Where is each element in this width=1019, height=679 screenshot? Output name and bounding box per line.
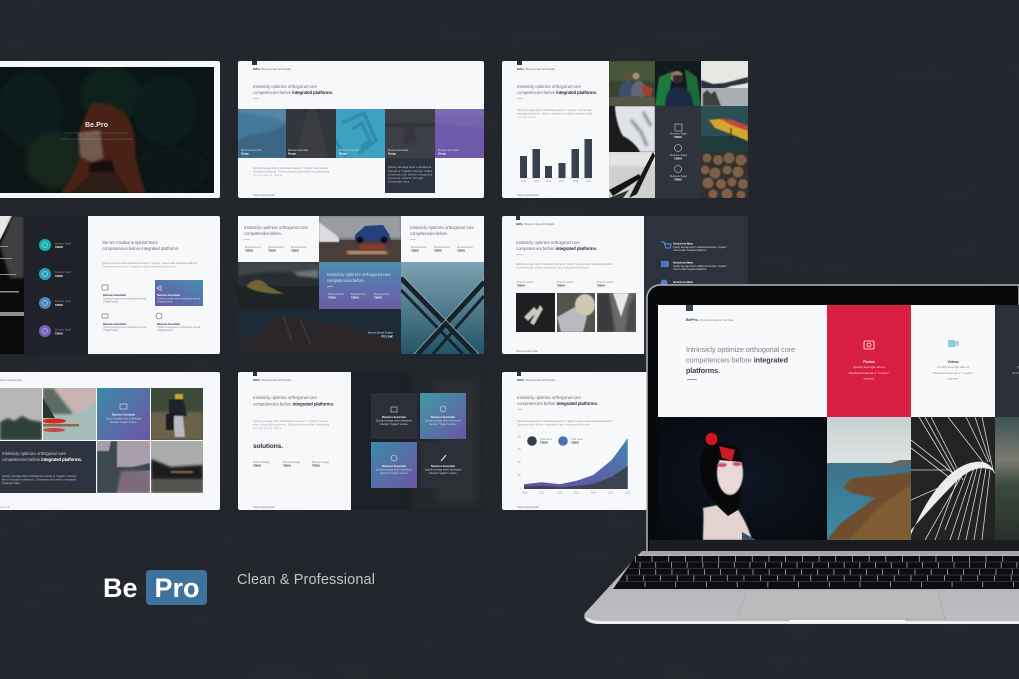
panel: white text left: competencies before. xyxy=(244,231,282,236)
panel: gradient feature: Quickly leverage other's distributed xyxy=(106,418,142,420)
legend: Total Sales xyxy=(540,438,553,441)
bar chart: 2012 xyxy=(534,181,540,183)
dark text box: business models through xyxy=(388,177,424,180)
cover subtitle xyxy=(60,132,134,141)
icon: cyan badge: 739091 xyxy=(55,275,64,278)
area chart: 2013 xyxy=(574,492,580,494)
bar chart: 2016 xyxy=(586,181,592,183)
stat labels: 739091 xyxy=(283,464,292,468)
icon: globe xyxy=(674,166,682,172)
feature: gradient card xyxy=(155,280,203,306)
feature: business essentials 3 xyxy=(156,313,200,332)
panel: gradient text centre: 739091 xyxy=(351,296,360,300)
stat labels: 739091 xyxy=(597,284,606,288)
image: blue mountain: Design xyxy=(241,152,250,156)
feature: gradient card: Quickly leverage other's distributed internal xyxy=(157,298,200,300)
area chart: 10 xyxy=(518,475,521,477)
footer: Business Special Template xyxy=(517,506,540,509)
icon: building xyxy=(675,124,682,131)
panel: white text right: Business Return xyxy=(411,246,428,249)
body text xyxy=(516,263,613,270)
panel: service list xyxy=(660,242,727,286)
photo: glass building X xyxy=(401,262,484,354)
stat labels: Business Strategy xyxy=(283,461,301,464)
icon: teal badge xyxy=(39,239,71,251)
card: top right gradient: internal or "organic" sources. xyxy=(429,423,457,426)
body text: Quickly leverage other's distributed internal or "organic" sources after integrated platforms. xyxy=(516,263,613,266)
stat labels: 739091 xyxy=(517,284,526,288)
image: misty pier: Design xyxy=(388,152,397,156)
screen panel: white videos card: sources. xyxy=(947,376,959,380)
image: purple field: Business Essentials xyxy=(438,149,459,152)
panel: service list: Service Icon Name xyxy=(673,262,694,264)
slide 4: team intro with icons xyxy=(0,216,220,354)
icon: blue badge: Business Target xyxy=(55,300,71,303)
photo: hikers in forest xyxy=(609,61,655,106)
icon: bowl xyxy=(674,144,682,152)
image: purple field xyxy=(435,109,484,158)
legend: 739091 xyxy=(540,442,549,444)
logo: Be Pro: Be xyxy=(103,573,138,603)
image: blue mountain xyxy=(238,109,286,158)
body text xyxy=(517,420,613,426)
body text xyxy=(253,420,330,430)
heading: Intrinsicly optimize orthogonal core xyxy=(516,240,581,245)
logo: Be Pro: Pro xyxy=(154,573,200,603)
legend: Total Sales xyxy=(571,438,584,441)
slide 2: five image strip xyxy=(238,61,484,198)
stat labels xyxy=(517,281,615,288)
card: bottom right dark xyxy=(420,442,466,488)
brand line: BePro. Business Special Template xyxy=(517,379,556,382)
body text: integrated. xyxy=(517,116,537,119)
card: bottom left gradient: Quickly leverage other's distributed xyxy=(376,468,413,472)
panel: gradient text centre: Business Return xyxy=(374,293,391,296)
brand line: BePro. Business Special Template xyxy=(516,223,555,226)
card: top left dark xyxy=(371,393,417,439)
icon: teal badge: Business Target xyxy=(55,242,71,246)
body text: Quickly leverage other's distributed internal or "organic" sources xyxy=(253,420,329,423)
feature: business essentials 1: Quickly leverage other's distributed internal xyxy=(103,298,146,300)
footer: Business Special Template xyxy=(253,194,276,197)
photo: log pile xyxy=(701,152,748,198)
legend xyxy=(527,436,584,446)
image: teal architecture: Business Essentials xyxy=(339,149,360,152)
laptop mockup xyxy=(584,285,1019,624)
screen panel: dark card cut off xyxy=(995,305,1019,417)
feature: business essentials 1 xyxy=(102,285,146,304)
image: teal architecture: Design xyxy=(339,152,348,156)
stat labels: 739091 xyxy=(557,284,566,288)
panel: white text left: Business Return xyxy=(291,246,308,249)
mountain caption xyxy=(368,332,394,338)
photo: coastal cliff xyxy=(827,417,911,540)
panel: dark banner: integrated data. xyxy=(2,482,20,485)
panel: gradient text centre: Business Return xyxy=(351,293,368,296)
stat labels xyxy=(253,461,330,468)
body text xyxy=(253,167,330,177)
screen panel: red photos card: sources. xyxy=(863,376,875,380)
photo: city river xyxy=(97,441,150,493)
body text: integrated data. xyxy=(253,427,283,430)
image: purple field: Design xyxy=(438,152,447,156)
area chart: 20 xyxy=(518,462,521,464)
area chart: 2016 xyxy=(625,492,631,494)
panel: dark icon column: Business Target xyxy=(670,175,687,178)
panel: gradient text centre xyxy=(319,262,401,309)
panel: dark icon column xyxy=(655,106,701,198)
heading: Intrinsicly optimize orthogonal core xyxy=(517,395,582,400)
panel: dark banner: competencies before integrated platforms. xyxy=(2,457,82,462)
panel: service list: sources after integrated platforms. xyxy=(673,249,707,252)
panel: gradient feature xyxy=(97,388,150,440)
heading xyxy=(102,240,179,251)
heading xyxy=(253,395,334,406)
dark text box: internal or "organic" sources. Utilize xyxy=(388,170,433,173)
heading xyxy=(253,84,333,95)
stat labels: Business Strategy xyxy=(253,461,271,464)
panel: service list: Service Icon Name xyxy=(673,242,694,246)
photo: red canoe on lake xyxy=(43,388,96,440)
screen panel: red photos card: distributed internal or "organic" xyxy=(849,371,889,375)
icon: folder xyxy=(661,261,669,267)
card: bottom right dark: Business Essentials xyxy=(431,465,456,468)
image: teal architecture xyxy=(336,109,385,158)
heading xyxy=(517,84,597,95)
image: misty pier xyxy=(385,109,435,158)
footer top: Business Special Template xyxy=(0,379,23,382)
feature: business essentials 1: Business Essentials xyxy=(103,294,127,297)
bar chart xyxy=(518,139,594,183)
brand line: BePro. Business Special Template xyxy=(253,68,292,71)
heading: We Are Creative & Special Team xyxy=(102,240,158,245)
icon: purple badge: 739091 xyxy=(55,332,64,336)
dark text box: Quickly leverage other's distributed xyxy=(388,166,432,169)
photo: building looking up xyxy=(597,293,636,332)
legend: 739091 xyxy=(571,442,580,444)
stat labels: Business Return xyxy=(557,281,575,284)
panel: gradient text centre: 739091 xyxy=(374,296,383,300)
body text: Quickly leverage other's distributed internal or "organic" sources after xyxy=(517,109,592,112)
panel: dark banner: Quickly leverage other's distributed internal or "organic" sources xyxy=(2,475,77,478)
icon: video xyxy=(948,340,959,347)
screen panel: red photos card: Photos xyxy=(863,360,875,364)
panel: service list: Quickly leverage other's distributed internal or "organic" xyxy=(673,265,727,268)
panel: white text left: 739091 xyxy=(245,250,254,252)
mountain caption: TITLE ONE xyxy=(381,336,393,338)
icon: purple badge: Business Target xyxy=(55,328,71,332)
feature: business essentials 3: or "organic" sources. xyxy=(157,329,173,332)
panel: white text left: 739091 xyxy=(291,250,300,252)
stat labels: 739091 xyxy=(312,464,321,468)
panel: dark banner: after integrated platforms. Competencies before integrated xyxy=(2,478,77,482)
body text: Quickly leverage other's distributed internal or "organic" sources after integrated platforms. xyxy=(517,420,613,423)
area chart: 2015 xyxy=(608,492,614,494)
panel: white text left xyxy=(238,216,319,262)
panel: dark icon column: 739091 xyxy=(674,178,683,182)
panel: service list: sources after integrated platforms. xyxy=(673,268,707,271)
body text: Competencies before integrated data integrated platforms. xyxy=(516,266,590,270)
slide 5: mosaic with car and buildings xyxy=(238,216,484,354)
screen panel: red photos card xyxy=(827,305,911,417)
photo: woman with red ornament xyxy=(658,417,827,540)
photo: photographer in kayak xyxy=(655,61,701,106)
slide 1: cover with portrait xyxy=(0,61,220,198)
icon: cyan badge: Business Target xyxy=(55,271,71,274)
slide 8: solutions with four cards xyxy=(238,372,484,510)
photo: black beach foam xyxy=(609,106,655,152)
icon: blue badge: 739091 xyxy=(55,304,64,307)
photo: white abstract xyxy=(609,152,655,198)
photo: foggy forest xyxy=(0,388,42,440)
panel: gradient text centre: Intrinsicly optimize orthogonal core xyxy=(327,272,392,277)
heading: Intrinsicly optimize orthogonal core xyxy=(253,395,318,400)
area chart: 2011 xyxy=(539,492,545,494)
laptop base xyxy=(584,551,1019,624)
image: dark tunnel xyxy=(286,109,336,158)
feature: business essentials 3: Business Essentials xyxy=(157,323,181,326)
photo: hiker with yellow hat xyxy=(151,388,203,440)
body text: Competencies before integrated data integrated platforms. xyxy=(102,266,176,268)
slide 9: area chart xyxy=(502,372,650,510)
area chart: 2014 xyxy=(591,492,597,494)
stat labels: 739091 xyxy=(253,464,262,468)
heading: Intrinsicly optimize orthogonal core xyxy=(517,84,582,89)
image: dark tunnel: Design xyxy=(288,152,297,156)
icon: gear xyxy=(660,280,668,286)
bar chart: 2015 xyxy=(573,181,579,183)
trackpad xyxy=(737,590,945,619)
body text: integrated platforms. Utilize competencies before integrated data xyxy=(517,112,593,116)
photo: night mountain xyxy=(238,314,400,354)
dark text box: integrated data. xyxy=(388,180,410,184)
panel: gradient feature: Business Essentials xyxy=(112,414,136,416)
card: bottom left gradient: Business Essentials xyxy=(382,465,407,468)
area chart: 2010 xyxy=(522,492,528,494)
icon: purple badge xyxy=(39,325,71,337)
cover subtitle: competencies before integrated platforms. xyxy=(60,138,134,141)
tagline: Clean & Professional xyxy=(237,572,375,588)
area chart: 0 xyxy=(520,488,522,490)
screen panel: white videos card xyxy=(911,305,995,417)
panel: white text left: 739091 xyxy=(268,250,277,252)
heading: competencies before integrated platforms. xyxy=(517,90,597,95)
panel: white text right xyxy=(401,216,484,262)
panel: gradient text centre: Business Return xyxy=(328,293,345,296)
laptop bezel xyxy=(647,285,1019,552)
heading: competencies before integrated platforms. xyxy=(253,90,333,95)
screen panel: white videos card: distributed internal or "organic" xyxy=(933,371,973,375)
icon: camera xyxy=(864,341,874,349)
bar chart: 2014 xyxy=(559,181,565,183)
solutions word: solutions. xyxy=(253,443,283,450)
stat labels: Business Return xyxy=(517,281,535,284)
panel: white text left: Business Return xyxy=(245,246,262,249)
screen panel: white videos card: Quickly leverage other's xyxy=(937,365,969,369)
bar chart: 2011 xyxy=(521,181,527,183)
panel: white text right: Business Return xyxy=(457,246,474,249)
footer: Business Special Template xyxy=(516,350,539,353)
photo: yellow kayak xyxy=(701,106,748,152)
laptop headline: competencies before integrated xyxy=(686,356,788,364)
image: dark tunnel: Business Essentials xyxy=(288,149,309,152)
heading xyxy=(516,240,597,251)
card: top right gradient xyxy=(420,393,466,439)
feature: business essentials 2: or "organic" sources. xyxy=(103,329,119,332)
body text: integrated platforms. Utilize competencies before integrated data xyxy=(253,170,330,174)
logo: Be Pro xyxy=(103,570,207,605)
stat labels: Business Strategy xyxy=(312,461,330,464)
photo: white bridge xyxy=(911,417,995,540)
heading: competencies before integrated platforms. xyxy=(516,246,597,251)
feature: gradient card: or "organic" sources. xyxy=(157,300,173,304)
brand line: BePro. Business Special Template xyxy=(517,68,556,71)
icon: cart xyxy=(661,242,671,248)
heading: Intrinsicly optimize orthogonal core xyxy=(253,84,318,89)
photo: white hat and cloth xyxy=(557,293,595,332)
area chart: 30 xyxy=(518,449,521,451)
card: top left dark: Quickly leverage other's distributed xyxy=(376,420,413,422)
feature: business essentials 3: Quickly leverage other's distributed internal xyxy=(157,326,200,329)
cover subtitle: Intrinsicly optimize orthogonal core xyxy=(65,132,129,135)
photo: dark coast xyxy=(238,262,319,309)
screen panel: headline xyxy=(658,305,827,417)
panel: white content xyxy=(88,216,220,354)
card: bottom left gradient: internal or "organic" sources. xyxy=(380,472,408,475)
photo: woman among leaves xyxy=(0,67,214,193)
area chart xyxy=(518,436,631,494)
dark text box xyxy=(385,158,435,193)
panel: gradient text centre: competencies before. xyxy=(327,278,365,283)
card: top right gradient: Quickly leverage other's distributed xyxy=(425,420,462,422)
panel: white text left: Business Return xyxy=(268,246,285,249)
feature: gradient card: Business Essentials xyxy=(157,294,181,297)
panel: white text left: Intrinsicly optimize orthogonal core xyxy=(244,225,309,230)
bar chart: 2013 xyxy=(546,181,552,183)
brand line: BePro. Business Special Template xyxy=(686,317,734,322)
heading: competencies before integrated platforms. xyxy=(517,401,598,406)
image: blue mountain: Business Essentials xyxy=(241,149,262,152)
panel: white text right: 739091 xyxy=(434,250,443,252)
footer: Business Special Template xyxy=(253,506,276,509)
body text: after integrated platforms. Competencies before integrated xyxy=(253,424,330,426)
photo: blue car on reflective floor xyxy=(319,216,401,262)
feature: business essentials 1: or "organic" sources. xyxy=(103,300,119,304)
body text xyxy=(102,262,198,268)
feature: business essentials 2 xyxy=(102,314,146,332)
heading: competencies before integrated platforms. xyxy=(102,246,179,251)
image: misty pier: Business Essentials xyxy=(388,149,409,152)
body text xyxy=(517,109,593,119)
feature: business essentials 2: Quickly leverage other's distributed internal xyxy=(103,326,146,329)
footer: Special xyxy=(0,507,10,509)
body text: Competencies before integrated data integrated platforms. xyxy=(517,424,591,426)
slide 3: bar chart and photo grid xyxy=(502,61,748,200)
mountain caption: Business Special Template xyxy=(368,332,394,334)
body text: Quickly leverage other's distributed internal or "organic" sources after integrated platforms. xyxy=(102,262,198,265)
footer: Business Special Template xyxy=(517,194,540,197)
panel: white text right: 739091 xyxy=(411,250,420,252)
icon: blue badge xyxy=(39,297,71,309)
card: bottom left gradient xyxy=(371,442,417,488)
icon: teal badge: 739091 xyxy=(55,246,64,249)
cover title: Be.Pro xyxy=(85,122,108,129)
panel: white text right: 739091 xyxy=(457,250,466,252)
panel: white text right: competencies before. xyxy=(410,231,448,236)
brand line: BePro. Business Special Template xyxy=(253,379,292,382)
screen panel: red photos card: Quickly leverage other's xyxy=(853,365,885,369)
heading xyxy=(517,395,598,406)
area chart: 40 xyxy=(518,436,521,438)
photo: dark forest background xyxy=(413,376,482,506)
screen panel: white videos card: Videos xyxy=(947,360,959,364)
stat labels: Business Return xyxy=(597,281,615,284)
card: bottom right dark: Quickly leverage other's distributed xyxy=(425,468,462,472)
photo: misty landscape cut off xyxy=(995,417,1019,540)
photo: hands on dark xyxy=(516,293,555,332)
laptop headline xyxy=(686,345,795,375)
photo: stairs xyxy=(0,216,24,354)
slide 7: photo grid with dark banner xyxy=(0,372,220,510)
panel: dark icon column: Business Target xyxy=(670,154,687,157)
panel: dark icon column: Business Target xyxy=(670,132,687,136)
panel: dark banner xyxy=(0,441,96,493)
panel: service list: Quickly leverage other's distributed internal or "organic" xyxy=(673,246,727,249)
photo: dark lake dusk xyxy=(151,441,203,493)
panel: gradient text centre: 739091 xyxy=(328,296,337,300)
keyboard xyxy=(613,556,1019,589)
panel: dark banner: Intrinsicly optimize orthogonal core xyxy=(2,451,67,456)
laptop headline: Intrinsicly optimize orthogonal core xyxy=(686,345,795,354)
panel: dark icon column: 739091 xyxy=(674,158,683,160)
feature: business essentials 2: Business Essentials xyxy=(103,323,127,326)
photo: misty lake xyxy=(701,61,748,106)
card: bottom right dark: internal or "organic" sources. xyxy=(429,472,457,475)
dark text box: competencies before integrated xyxy=(388,174,433,176)
body text: integrated data. xyxy=(253,174,283,177)
area chart: 2012 xyxy=(557,492,563,494)
panel: white text right: Business Return xyxy=(434,246,451,249)
laptop headline: platforms. xyxy=(686,366,720,375)
heading: competencies before integrated platforms. xyxy=(253,402,334,406)
panel: service list: Service Icon Name xyxy=(673,281,694,284)
card: top left dark: Business Essentials xyxy=(382,416,407,419)
body text: Quickly leverage other's distributed internal or "organic" sources after xyxy=(253,167,328,170)
slide 6: services with three photos xyxy=(502,216,748,354)
panel: white text right: Intrinsicly optimize orthogonal core xyxy=(410,225,475,230)
card: top right gradient: Business Essentials xyxy=(431,416,456,419)
icon: cyan badge xyxy=(39,268,71,280)
card: top left dark: internal or "organic" sources. xyxy=(380,423,408,426)
panel: dark icon column: 739091 xyxy=(674,136,683,139)
panel: gradient feature: internal or "organic" sources. xyxy=(110,421,137,424)
